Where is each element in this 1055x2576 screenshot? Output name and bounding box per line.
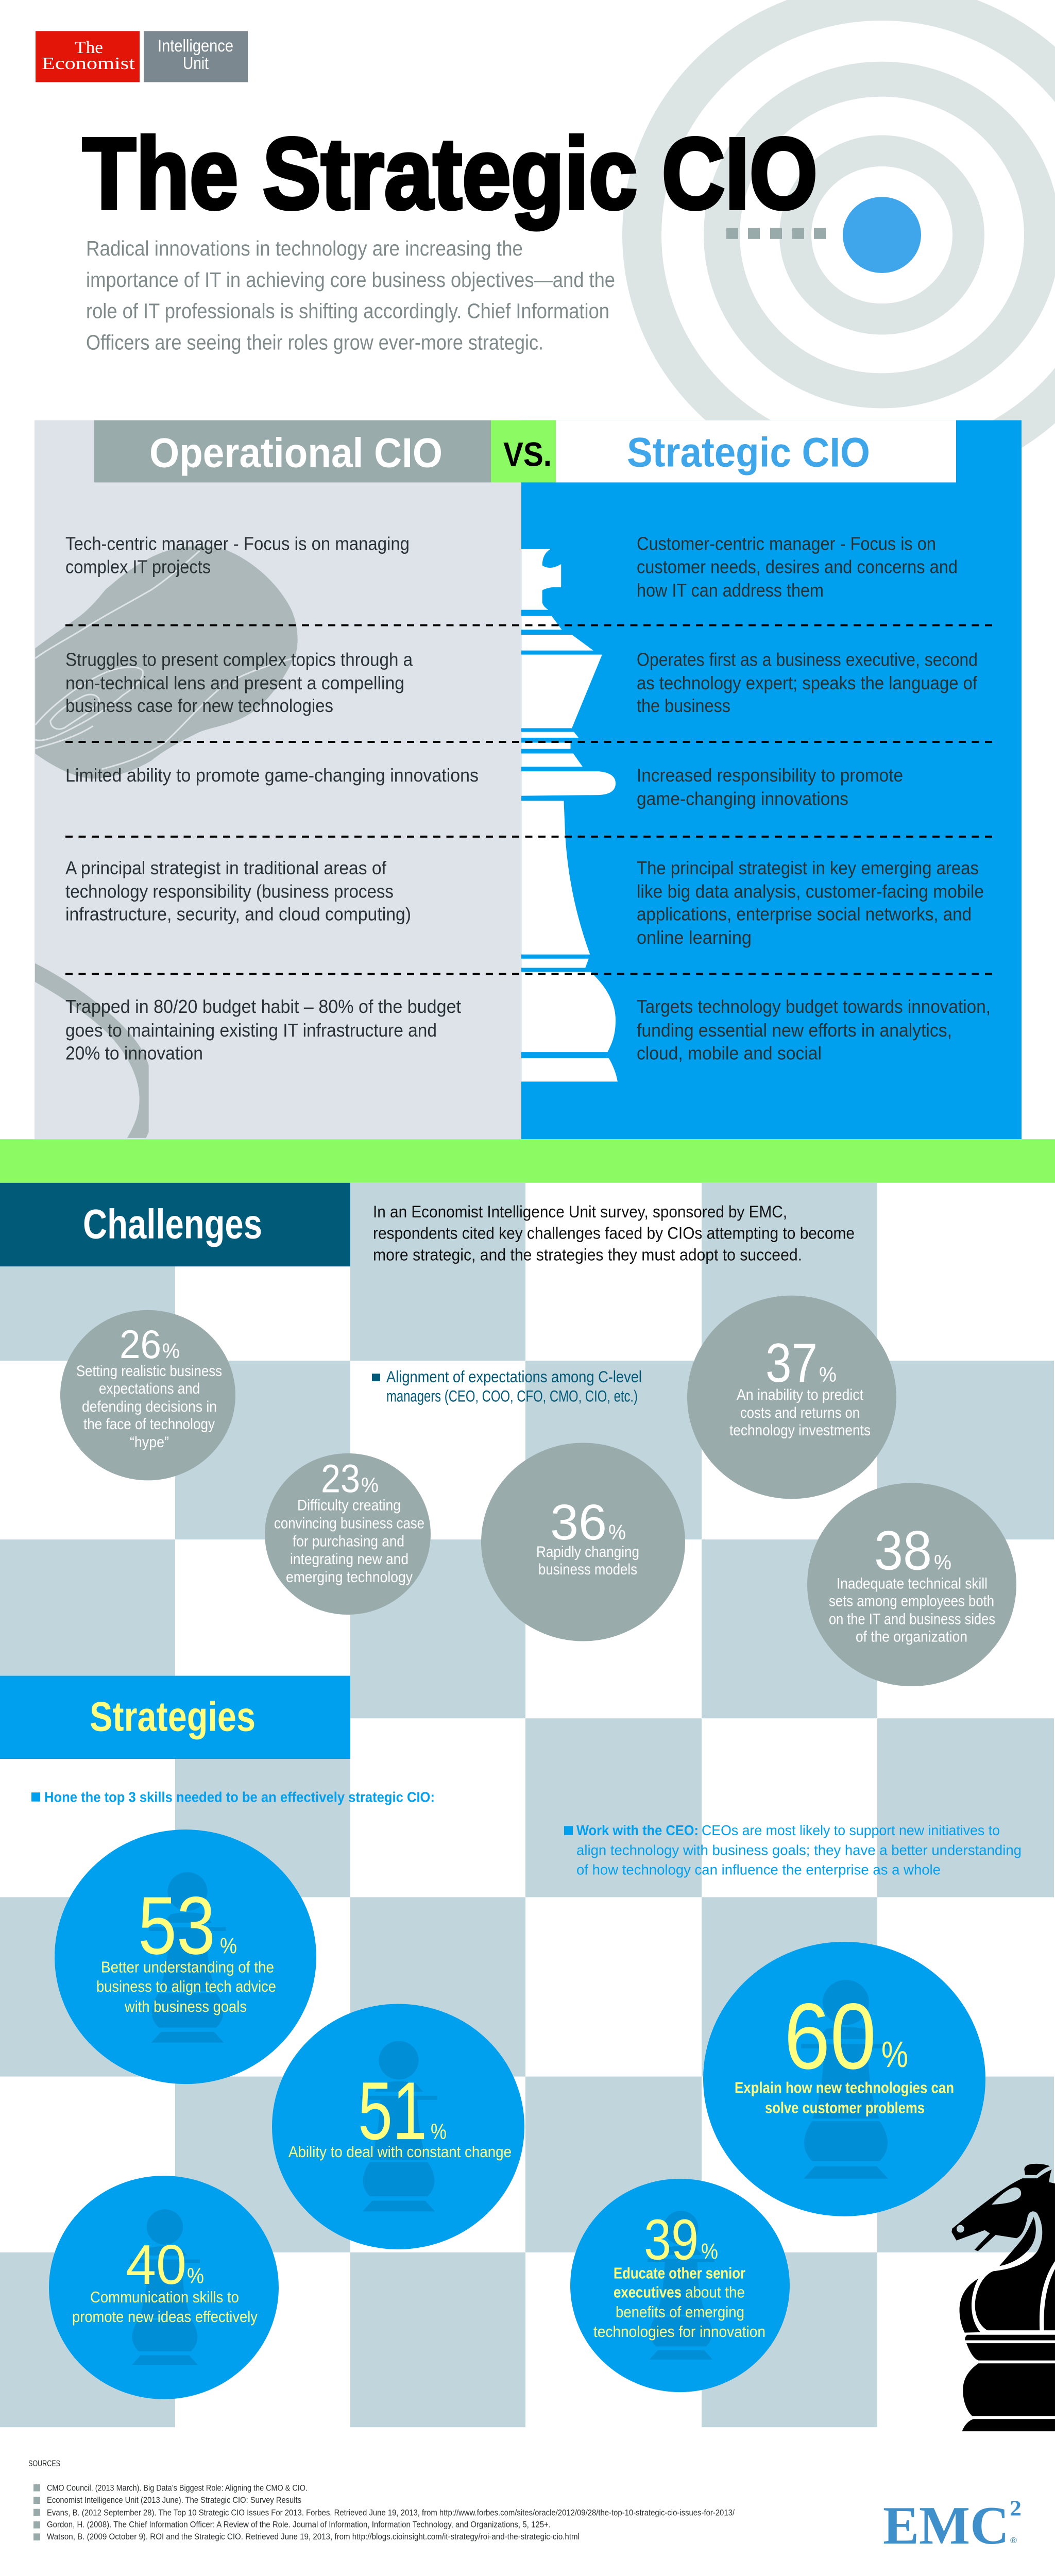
stat circle: 36%: 36 [550,1494,607,1550]
stat circle: 37%: technology investments [729,1422,871,1439]
text: operational row 5: 20% to innovation [65,1043,203,1063]
text: strategic row 3: game-changing innovations [637,788,848,809]
stat circle: 26%: expectations and [99,1381,200,1397]
text: survey intro [373,1202,855,1264]
text: strategic row 1: how IT can address them [637,580,824,601]
text: strategic row 5: Targets technology budget towards innovation, [637,996,991,1017]
stat circle: 40%: promote new ideas effectively [72,2308,258,2326]
panel: comparison [35,420,1022,1139]
stat circle: 51% [272,2004,524,2249]
stat circle: 26%: the face of technology [83,1416,215,1433]
intro paragraph: Radical innovations in technology are increasing the [86,236,523,260]
text: survey intro: respondents cited key challenges faced by CIOs attempting to become [373,1224,855,1243]
stat circle: 36%: Rapidly changing [536,1544,639,1561]
arrow dashes pointing at target [726,228,826,239]
icon: white queen silhouette [521,549,618,1081]
text: alignment bullet [372,1367,642,1405]
text: strategic row 4 [637,857,984,948]
heading: VS. [491,420,556,482]
stat circle: 39%: % [701,2240,718,2264]
heading: Strategies: Strategies [90,1694,256,1740]
text: strategic row 5 [637,996,991,1063]
stat circle: 38%: % [934,1551,951,1574]
text: survey intro: more strategic, and the strategies they must adopt to succeed. [373,1246,802,1264]
text: strategic row 4: The principal strategist in key emerging areas [637,857,979,878]
sources list: Watson, B. (2009 October 9). ROI and the Strategic CIO. Retrieved June 19, 2013, from http://blogs.cioinsight.com/it-strategy/roi-and-the-strategic-cio.html [47,2532,580,2541]
stat circle: 40%: Communication skills to [90,2289,239,2306]
stat circle: 23%: convincing business case [274,1515,424,1532]
stat circle: 39%: benefits of emerging [616,2304,744,2321]
heading: Challenges: Challenges [83,1201,262,1247]
sources heading: SOURCES [28,2459,60,2468]
intro paragraph: Officers are seeing their roles grow ever-more strategic. [86,331,543,354]
stat circle: 39%: executives [614,2284,682,2301]
heading: Challenges [0,1183,350,1266]
stat circle: 60% [703,1942,985,2216]
stat circle: 37% [687,1296,896,1499]
stat circle: 26%: 26 [120,1322,161,1367]
stat circle: 26%: “hype” [130,1434,169,1451]
stat circle: 37%: 37 [765,1332,818,1394]
stat circle: 53% [55,1829,316,2084]
text: work with the CEO bullet: align technology with business goals; they have a better understanding [576,1842,1022,1859]
text: strategic row 5: funding essential new efforts in analytics, [637,1020,952,1041]
text: operational row 2 [65,649,413,716]
heading: Strategies [0,1676,350,1759]
logo: EMC2: ® [1010,2536,1017,2545]
stat circle: 23%: % [361,1473,379,1497]
text: operational row 5 [65,996,461,1063]
text: strategic row 2: as technology expert; speaks the language of [637,672,978,693]
stat circle: 23%: Difficulty creating [297,1497,401,1514]
stat circle: 23%: integrating new and [290,1551,409,1568]
text: strategic row 2: the business [637,695,730,716]
icon: black knight [951,2164,1055,2431]
stat circle: 51%: % [431,2120,447,2144]
text: operational row 3: Limited ability to promote game-changing innovations [65,765,479,786]
stat circle: 36%: business models [538,1562,637,1578]
stat circle: 53%: business to align tech advice [96,1978,276,1995]
text: strategic row 4: like big data analysis, customer-facing mobile [637,881,984,902]
stat circle: 40%: 40 [126,2233,186,2296]
stat circle: 23%: 23 [321,1456,360,1501]
text: work with the CEO bullet: Work with the CEO: [576,1822,699,1839]
intro paragraph: importance of IT in achieving core business objectives—and the [86,268,615,292]
heading: Strategic CIO: Strategic CIO [627,429,870,476]
text: operational row 2: business case for new technologies [65,695,333,716]
stat circle: 37%: % [819,1363,837,1386]
icon: grey bishop silhouette [35,547,298,778]
text: alignment bullet: managers (CEO, COO, CFO, CMO, CIO, etc.) [386,1387,638,1405]
stat circle: 51%: Ability to deal with constant change [288,2143,512,2161]
stat circle: 38%: of the organization [856,1629,967,1645]
intro paragraph [86,236,615,354]
sources list: Evans, B. (2012 September 28). The Top 10 Strategic CIO Issues For 2013. Forbes. Retrieved June 19, 2013, from http://www.forbes.com/sites/oracle/2012/09/28/the-top-10-strategic-cio-issues-for-2013/ [47,2508,735,2517]
text: strategic row 2: Operates first as a business executive, second [637,649,978,670]
panel: strategic background [521,420,1022,1139]
sources list [33,2483,735,2541]
stat circle: 26% [60,1310,235,1480]
text: work with the CEO bullet [564,1822,1022,1878]
logo: Intelligence Unit: Unit [183,55,209,73]
stat circle: 60%: solve customer problems [765,2099,925,2116]
stat circle: 40% [49,2176,279,2399]
stat circle: 38%: sets among employees both [829,1593,994,1609]
stat circle: 37%: costs and returns on [740,1404,860,1421]
logo: The Economist: Economist [42,54,135,73]
text: strategic row 2 [637,649,978,716]
text: alignment bullet: Alignment of expectations among C-level [386,1367,642,1386]
stat circle: 39%: Educate other senior [614,2265,745,2282]
text: operational row 2: Struggles to present complex topics through a [65,649,413,670]
stat circle: 53%: 53 [138,1880,215,1972]
stat circle: 53%: % [220,1934,237,1958]
text: strategic row 1: Customer-centric manager - Focus is on [637,533,936,554]
logo: EMC2: 2 [1010,2496,1022,2520]
text: operational row 5: Trapped in 80/20 budget habit – 80% of the budget [65,996,461,1017]
logo: Intelligence Unit [144,31,248,82]
title: The Strategic CIO [82,117,818,230]
stat circle: 60%: % [881,2035,908,2075]
intro paragraph: role of IT professionals is shifting accordingly. Chief Information [86,299,609,323]
logo: The Economist [36,31,140,82]
stat circle: 36%: % [608,1521,626,1544]
heading: Operational CIO [94,420,491,482]
text: strategic row 1 [637,533,958,601]
stat circle: 39% [570,2179,790,2392]
stat circle: 37%: An inability to predict [737,1386,863,1403]
text: operational row 4: infrastructure, security, and cloud computing) [65,904,411,924]
stat circle: 39%: about the [685,2284,745,2301]
stat circle: 38%: on the IT and business sides [829,1611,995,1628]
checkerboard background [0,1183,1054,2427]
text: operational row 1 [65,533,410,577]
text: operational row 2: non-technical lens and present a compelling [65,672,404,693]
stat circle: 38% [807,1483,1016,1686]
stat circle: 26%: Setting realistic business [76,1363,222,1380]
text: hone bullet: Hone the top 3 skills needed to be an effectively strategic CIO: [44,1789,435,1806]
stat circle: 60%: Explain how new technologies can [735,2079,954,2097]
stat circle: 23% [265,1453,431,1615]
stat circle: 51%: 51 [358,2065,427,2157]
heading: VS.: VS. [503,435,552,473]
text: work with the CEO bullet: of how technology can influence the enterprise as a whole [576,1862,941,1878]
logo: The Economist: The [75,38,103,57]
stat circle: 38%: 38 [874,1520,932,1582]
text: strategic row 3: Increased responsibility to promote [637,765,903,786]
logo: EMC2: EMC [883,2496,1009,2555]
target rings graphic [642,2,1055,468]
stat circle: 36% [481,1443,685,1641]
text: strategic row 1: customer needs, desires and concerns and [637,556,958,577]
sources list: CMO Council. (2013 March). Big Data’s Biggest Role: Aligning the CMO & CIO. [47,2483,308,2493]
stat circle: 26%: % [162,1340,180,1363]
heading: Operational CIO: Operational CIO [149,430,443,476]
stat circle: 40%: % [187,2264,204,2289]
text: operational row 4: A principal strategist in traditional areas of [65,857,387,878]
stat circle: 26%: defending decisions in [82,1399,217,1415]
stat circle: 53%: Better understanding of the [101,1959,274,1976]
sources list: Gordon, H. (2008). The Chief Information Officer: A Review of the Role. Journal of Information, Information Technology, and Organizations, 5, 125+. [47,2520,551,2530]
heading: Strategic CIO [556,420,956,482]
panel: operational background [35,420,521,1139]
text: strategic row 5: cloud, mobile and social [637,1043,822,1063]
green divider band [0,1139,1055,1183]
stat circle: 53%: with business goals [124,1998,247,2015]
stat circle: 39%: technologies for innovation [593,2324,765,2341]
text: operational row 5: goes to maintaining existing IT infrastructure and [65,1020,437,1041]
text: work with the CEO bullet: CEOs are most likely to support new initiatives to [702,1822,1000,1839]
stat circle: 38%: Inadequate technical skill [837,1575,988,1592]
stat circle: 23%: for purchasing and [293,1533,404,1550]
text: survey intro: In an Economist Intelligence Unit survey, sponsored by EMC, [373,1202,787,1221]
text: strategic row 3 [637,765,903,809]
text: strategic row 4: applications, enterprise social networks, and [637,904,972,924]
text: operational row 4: technology responsibility (business process [65,881,394,902]
sources [28,2459,735,2541]
sources list: Economist Intelligence Unit (2013 June). The Strategic CIO: Survey Results [47,2495,301,2505]
logo: Intelligence Unit: Intelligence [158,37,233,56]
stat circle: 23%: emerging technology [286,1569,413,1586]
text: strategic row 4: online learning [637,927,752,948]
stat circle: 60%: 60 [784,1984,876,2089]
icon: bishop base curve [35,963,149,1138]
text: operational row 4 [65,857,411,924]
stat circle: 39%: 39 [644,2208,699,2272]
text: operational row 1: Tech-centric manager - Focus is on managing [65,533,410,554]
text: operational row 1: complex IT projects [65,556,211,577]
